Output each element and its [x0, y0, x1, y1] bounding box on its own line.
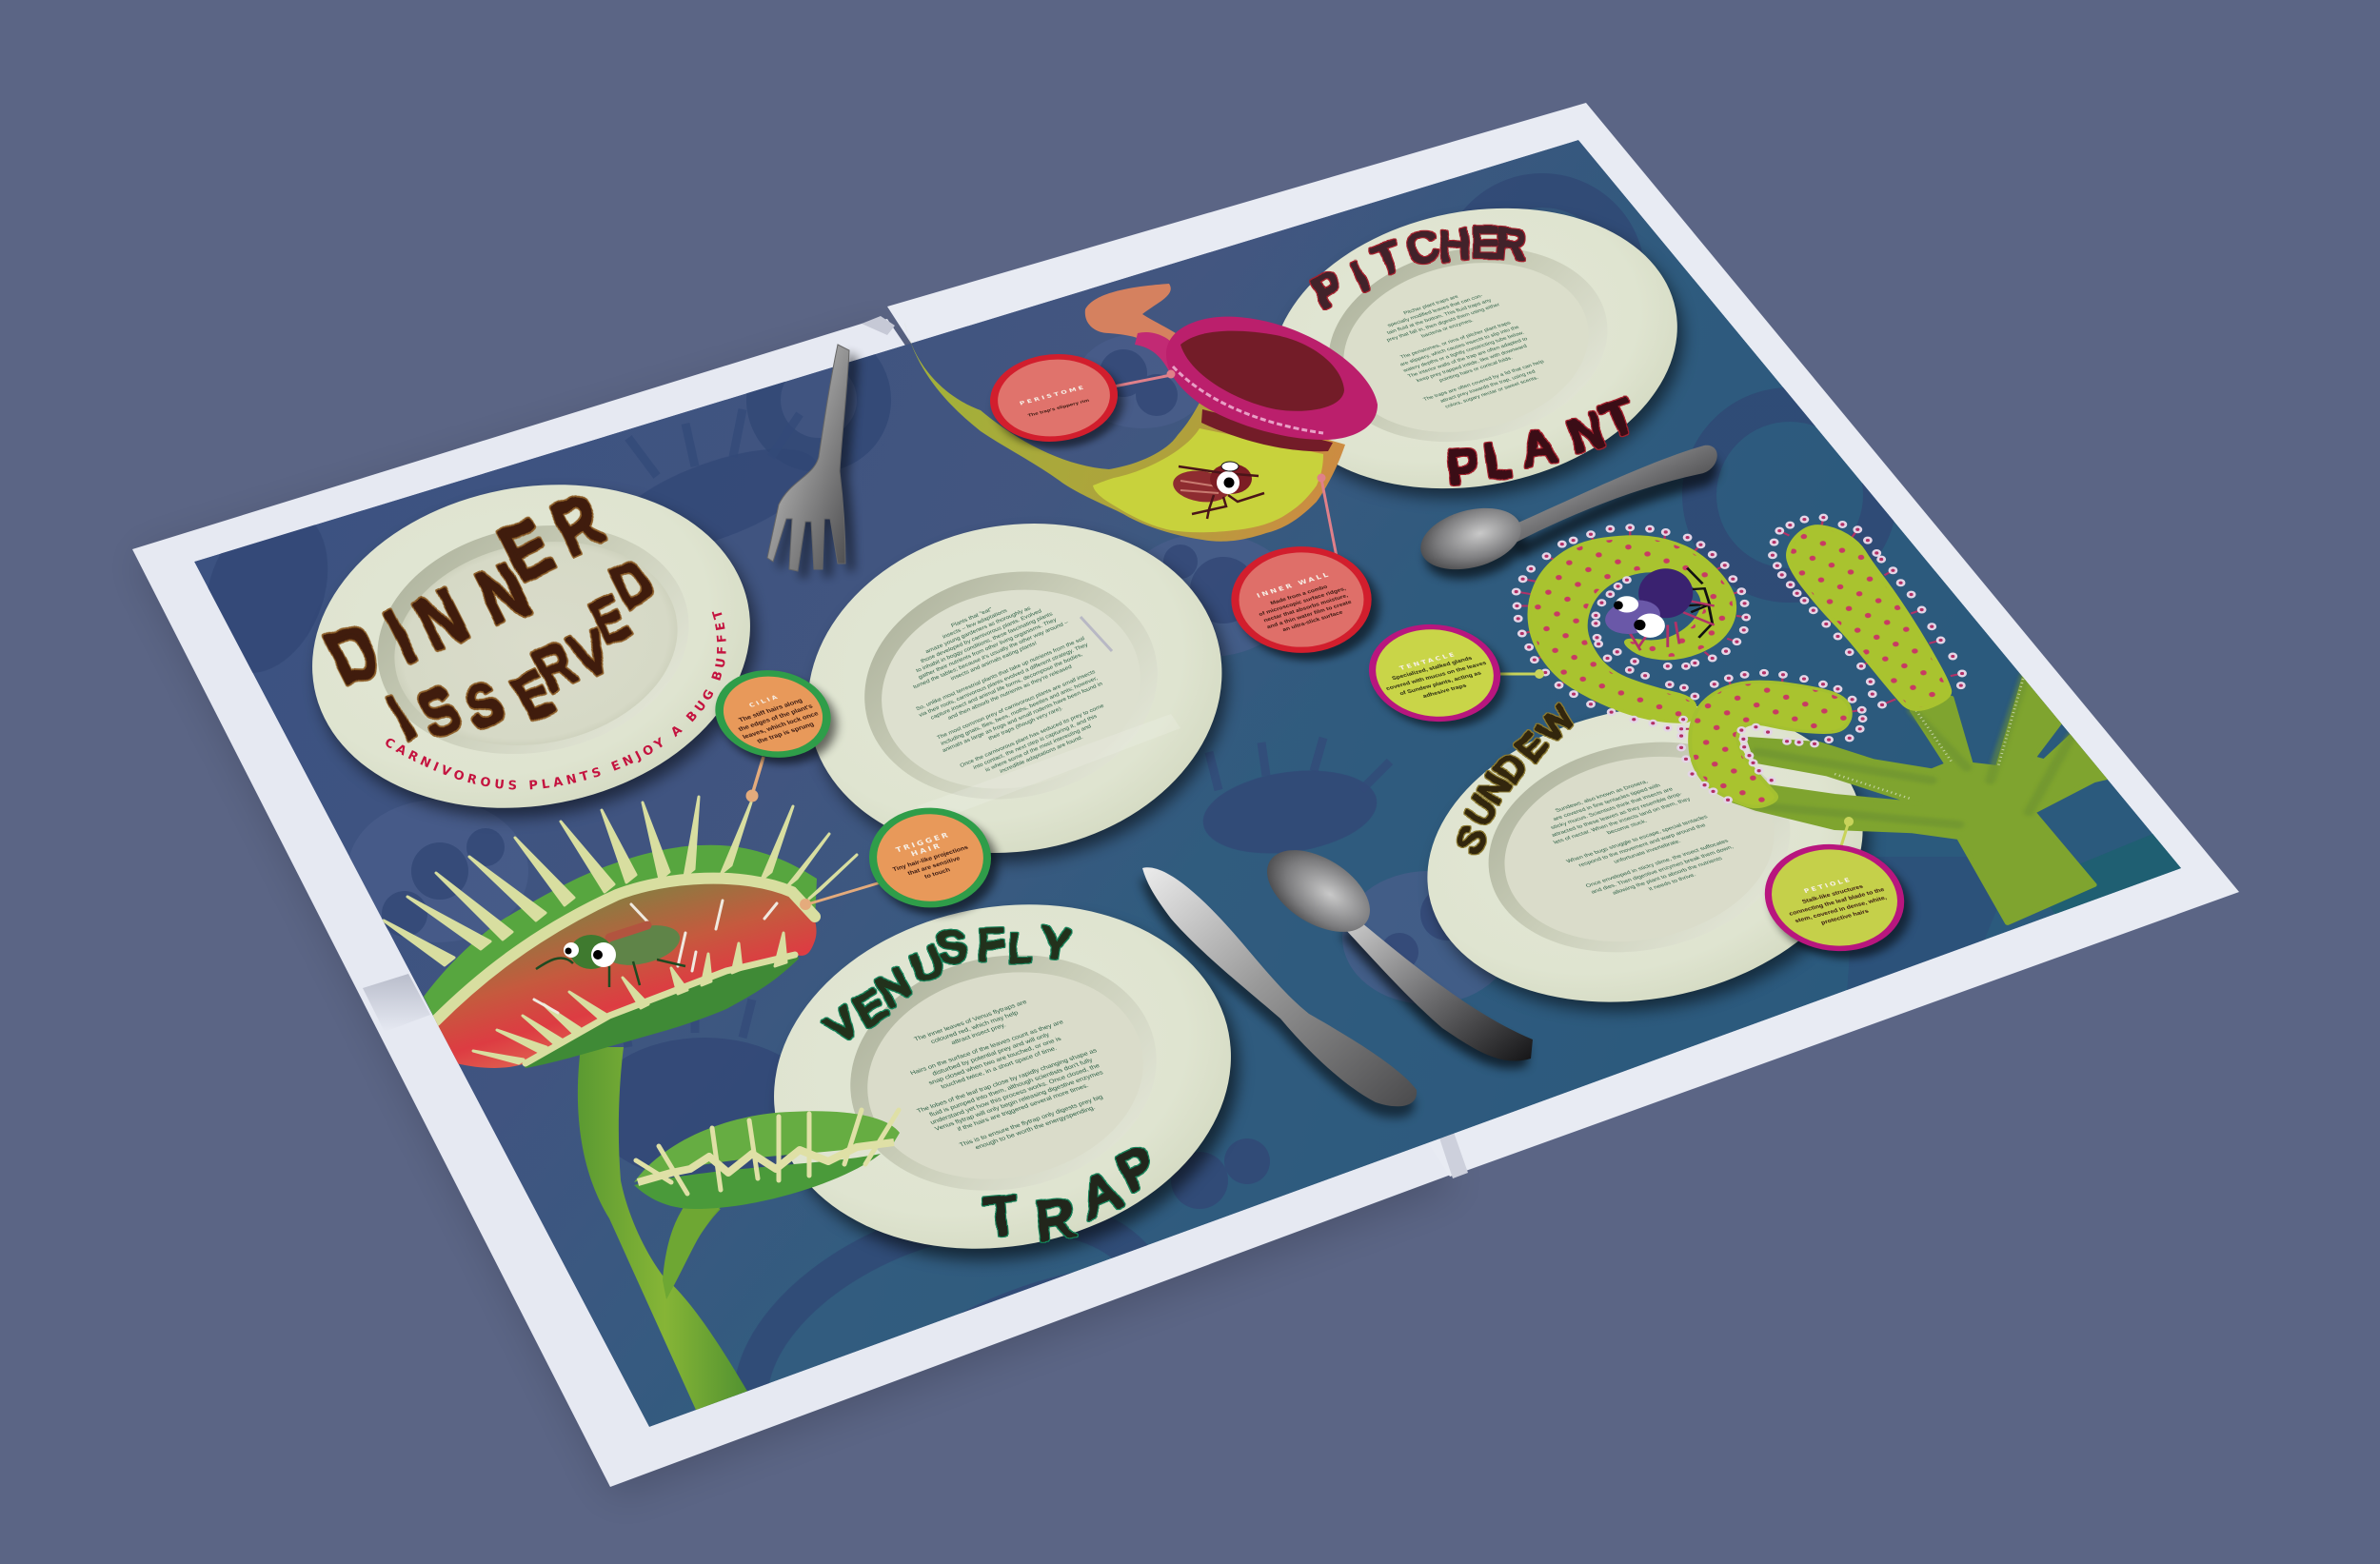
- venus text: if the hairs are triggered several more times.: [957, 1082, 1090, 1133]
- heading: sundew: SUNDEW: [1449, 699, 1583, 861]
- pitcher text: [1369, 284, 1554, 414]
- callout: inner wall: of microscopic surface ridges,: [1259, 586, 1347, 618]
- callout: trigger hair: HAIR: [910, 841, 943, 858]
- callout: trigger hair: Tiny hair-like projections: [892, 844, 970, 873]
- intro text: capture insect and animal life forms, decompose the bodies,: [930, 652, 1084, 721]
- callout: tentacle: [1353, 614, 1526, 742]
- intro text: via their roots, carnivorous plants evolved a different strategy. They: [919, 643, 1089, 719]
- long leaf: [1788, 526, 1950, 709]
- pitcher text: prey that fall in, then digests them using either: [1386, 303, 1501, 343]
- venus text: This is to ensure the flytrap only digests prey big: [959, 1094, 1104, 1148]
- callout: cilia: leaves, which lock once: [742, 711, 820, 741]
- plant: sundew: [1517, 518, 2165, 923]
- intro text: insects and animals eating plants!: [950, 641, 1038, 682]
- callout: petiole: protective hairs: [1820, 908, 1871, 926]
- venus text: attract insect prey.: [950, 1022, 1007, 1046]
- pitcher text: The interior walls of the trap are often adapted to: [1407, 337, 1529, 379]
- callout: tentacle: adhesive traps: [1421, 683, 1468, 700]
- pitcher text: pointing hairs or conical folds.: [1438, 356, 1515, 384]
- callout: cilia: the edges of the plant's: [738, 703, 814, 733]
- callout: peristome: The trap's slippery rim: [1027, 398, 1090, 418]
- sundew text: are covered in fine tentacles tipped with: [1552, 782, 1662, 822]
- intro text: amaze young gardeners as thoroughly as: [924, 606, 1032, 655]
- callout: inner wall: an ultra-slick surface: [1282, 610, 1344, 633]
- intro text: Once the carnivorous plant has seduced its prey to come: [960, 703, 1105, 769]
- sundew text: Once enveloped in sticky slime, the insect suffocates: [1584, 839, 1730, 889]
- venus text: touched twice, in a short space of time.: [940, 1045, 1059, 1090]
- callout: petiole: Stalk-like structures: [1801, 883, 1865, 905]
- callout: cilia: CILIA: [747, 693, 782, 709]
- pitcher text: are slippery, which causes insects to slip into the: [1399, 325, 1520, 367]
- cilia teeth: [384, 797, 857, 1063]
- callout: peristome: PERISTOME: [1019, 384, 1087, 406]
- heading: venus fly: VENUS FLY: [818, 919, 1073, 1053]
- callout: trigger hair: to touch: [923, 867, 951, 881]
- callout: tentacle: covered with mucus on the leaves: [1385, 660, 1488, 692]
- venus text: [880, 987, 1127, 1161]
- pitcher text: bacteria or enzymes.: [1420, 318, 1475, 339]
- subtitle: CARNIVOROUS PLANTS ENJOY A BUG BUFFET: [386, 611, 726, 790]
- pitcher text: colors, sugary nectar or sweet scents.: [1444, 375, 1540, 409]
- sundew text: Sundews, also known as Drosera,: [1554, 779, 1650, 813]
- pitcher rim: [1166, 317, 1378, 440]
- pitcher text: keep prey trapped inside, like with downward: [1416, 344, 1528, 384]
- venus text: enough to be worth the energyspending.: [974, 1105, 1097, 1151]
- callout: tentacle: TENTACLE: [1398, 651, 1458, 672]
- heading: trap: TRAP: [982, 1134, 1165, 1252]
- callout: petiole: stem, covered in dense, white,: [1794, 895, 1888, 924]
- venus text: fluid is pumped into them, although scientists don't fully: [928, 1058, 1095, 1119]
- lower curl leaf: [1690, 682, 1851, 806]
- plant: small closed trap: [634, 1110, 900, 1209]
- intro text: including gnats, flies, bees, moths, beetles and ants; however,: [941, 676, 1099, 747]
- plate: sundew: [1401, 670, 1895, 1047]
- heading: pitcher: PITCHER: [1304, 220, 1528, 317]
- intro text: into contact, the next step is capturing it, and this: [973, 714, 1098, 771]
- sundew text: become stuck.: [1606, 819, 1649, 836]
- sundew text: and dies. Then digestive enzymes break them down,: [1590, 844, 1735, 895]
- plate: venus fly trap: [744, 866, 1269, 1298]
- pitcher text: The traps are often covered by a lid that can help: [1422, 360, 1545, 403]
- connector: trigger hair: [800, 882, 881, 910]
- sundew text: allowing the plant to absorb the nutrients: [1611, 856, 1724, 896]
- intro text: insects – few adaptations: [942, 608, 1008, 640]
- poster artwork background: [184, 140, 2190, 1539]
- pitcher text: tain fluid at the bottom. This fluid traps any: [1386, 298, 1493, 336]
- sundew text: [1529, 771, 1745, 907]
- pitcher lid: [1085, 284, 1190, 357]
- callout: inner wall: nectar that absorbs moisture,: [1263, 593, 1350, 624]
- connector: inner wall: [1318, 474, 1337, 557]
- callout: inner wall: and a thin water film to create: [1266, 600, 1354, 630]
- callout: tentacle: Specialized, stalked glands: [1391, 655, 1474, 682]
- main trap: [384, 797, 857, 1068]
- callout: cilia: The stiff hairs along: [738, 698, 803, 723]
- stem: [578, 1047, 752, 1418]
- spiral leaf: [1530, 537, 1735, 722]
- pitcher text: watery depths or a tightly constricting tube below.: [1401, 330, 1526, 374]
- heading: dinner: DINNER: [305, 479, 630, 708]
- intro text: animals as large as frogs and small rodents have been found in: [942, 682, 1103, 754]
- plate: dinner is served: [305, 479, 764, 826]
- pitcher text: specially modified leaves that can con-: [1387, 294, 1484, 328]
- callout: cilia: [701, 661, 857, 778]
- sundew text: lets of nectar. When the insects land on them, they: [1553, 796, 1693, 845]
- icon: green fly: [536, 919, 685, 987]
- sundew text: sticky mucus. Scientists think that insects are: [1549, 786, 1675, 831]
- intro text: turned the tables; because it's usually the other way around –: [913, 620, 1070, 690]
- connector: tentacle: [1500, 669, 1544, 679]
- connector: cilia: [746, 757, 764, 802]
- callout: inner wall: [1216, 534, 1400, 677]
- callout: petiole: connecting the leaf blade to the: [1788, 886, 1886, 917]
- icon: purple spider: [1600, 568, 1715, 650]
- callout: petiole: PETIOLE: [1803, 876, 1854, 895]
- plant: venus flytrap: [384, 797, 857, 1418]
- intro text: The most common prey of carnivorous plants are small insects: [937, 669, 1097, 741]
- intro text: is where some of the most interesting and: [984, 724, 1092, 773]
- icon: spoon top right: [1414, 445, 1718, 589]
- callout: trigger hair: [857, 798, 1016, 929]
- callout: trigger hair: TRIGGER: [895, 830, 951, 854]
- callout: tentacle: of Sundew plants, acting as: [1398, 670, 1483, 697]
- connector: peristome: [1114, 369, 1175, 386]
- icon: knife: [1140, 867, 1417, 1118]
- plate: pitcher plant: [1247, 175, 1708, 531]
- venus text: The lobes of the leaf trap close by rapidly changing shape as: [916, 1048, 1099, 1115]
- plant: pitcher: [904, 284, 1378, 542]
- intro text: [886, 580, 1127, 793]
- intro text: incredible adaptations are found.: [1000, 735, 1084, 775]
- tentacle dots: [1517, 518, 1962, 800]
- intro text: those developed by carnivorous plants. Evolved: [920, 609, 1042, 664]
- trigger hairs: [534, 901, 777, 1013]
- sundew text: attracted to these leaves as they resemble drop-: [1550, 791, 1684, 838]
- connector: petiole: [1840, 817, 1854, 849]
- intro text: gather their nutrients from other living organisms. They: [918, 618, 1058, 681]
- venus text: The inner leaves of Venus flytraps are: [913, 1000, 1028, 1042]
- pitcher body: [904, 322, 1345, 542]
- venus text: understand yet how this process works. Once closed, the: [929, 1063, 1101, 1126]
- venus text: Venus flytrap will only begin releasing digestive enzymes: [934, 1070, 1105, 1132]
- callout: cilia: the trap is sprung: [756, 722, 816, 744]
- tentacle stalks: [1520, 521, 1958, 730]
- sundew text: When the bugs struggle to escape, special tentacles: [1565, 814, 1709, 864]
- icon: fork: [767, 345, 859, 579]
- venus text: disturbed by potential prey and will only: [931, 1032, 1051, 1077]
- intro text: So, unlike most terrestrial plants that take up nutrients from the soil: [916, 636, 1085, 712]
- intro text: Plants that "eat": [950, 607, 993, 629]
- venus text: Hairs on the surface of the leaves count as they are: [909, 1020, 1064, 1077]
- pitcher text: Pitcher plant traps are: [1403, 294, 1459, 316]
- icon: red fly: [1171, 462, 1264, 519]
- sundew text: unfortunate invertebrate.: [1613, 839, 1682, 864]
- venus text: coloured red, which may help: [930, 1010, 1020, 1045]
- heading: served: SERVED: [433, 547, 688, 752]
- icon: spoon bottom: [1253, 833, 1533, 1068]
- pitcher text: The peristomes, or rims of pitcher plant traps: [1399, 321, 1512, 360]
- callout: inner wall: Made from a combo: [1270, 584, 1329, 606]
- sundew stem: [1731, 676, 2108, 925]
- sundew text: it needs to thrive.: [1648, 872, 1697, 892]
- callout: trigger hair: that are sensitive: [907, 856, 962, 877]
- sundew text: respond to the movement and warp around the: [1577, 822, 1708, 868]
- intro text: their traps (though very rare).: [988, 705, 1064, 742]
- callout: inner wall: INNER WALL: [1256, 570, 1332, 600]
- intro text: and then absorb the nutrients as they're released: [947, 664, 1073, 722]
- heading: plant: PLANT: [1445, 388, 1641, 495]
- pitcher text: attract prey towards the trap, using red: [1439, 369, 1537, 404]
- callout: peristome: [979, 345, 1140, 461]
- venus text: snap closed when two are touched, or one is: [927, 1036, 1063, 1086]
- plate: introduction: [779, 488, 1257, 898]
- callout: petiole: [1748, 834, 1933, 973]
- magazine paper: [132, 103, 2239, 1496]
- heading: is: IS: [378, 663, 471, 762]
- intro text: to inhabit in boggy conditions, these fascinating plants: [916, 612, 1054, 674]
